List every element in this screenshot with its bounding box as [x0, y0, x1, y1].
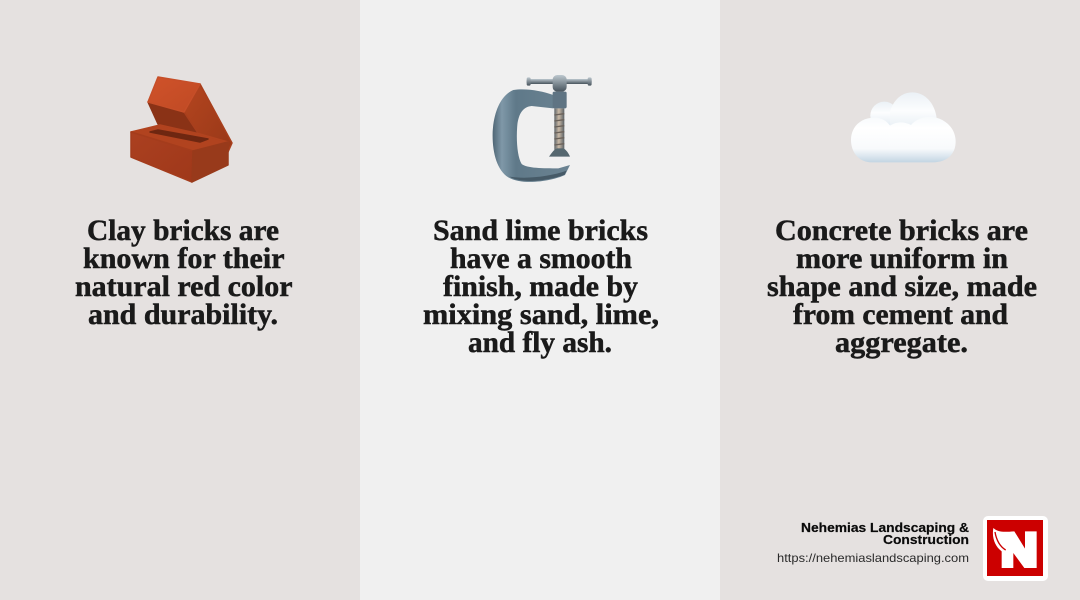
panel: concrete bricks	[720, 0, 1080, 600]
heading: concrete bricks text: aggregate.	[835, 327, 968, 359]
panel: clay bricks	[0, 0, 360, 600]
heading: clay bricks text: and durability.	[88, 299, 278, 331]
heading: sand lime bricks text: mixing sand, lime,	[423, 299, 659, 331]
heading: sand lime bricks text: have a smooth	[450, 243, 632, 275]
panel: sand lime bricks	[360, 0, 720, 600]
logo: Nehemias N badge	[983, 516, 1048, 581]
heading: sand lime bricks text: Sand lime bricks	[433, 215, 648, 247]
heading: clay bricks text: known for their	[83, 243, 284, 275]
icon: clay bricks	[131, 77, 232, 182]
footer: company name: Construction	[883, 532, 969, 547]
heading: concrete bricks text: from cement and	[793, 299, 1009, 331]
heading: concrete bricks text: shape and size, made	[767, 271, 1037, 303]
icon: clamp	[493, 75, 592, 182]
icon: cloud	[851, 92, 956, 162]
heading: concrete bricks text: more uniform in	[796, 243, 1008, 275]
footer: company name: Nehemias Landscaping &	[801, 520, 969, 535]
heading: clay bricks text: Clay bricks are	[87, 215, 279, 247]
footer: website url: https://nehemiaslandscaping.com	[777, 551, 969, 565]
heading: sand lime bricks text: finish, made by	[443, 271, 638, 303]
heading: sand lime bricks text: and fly ash.	[468, 327, 612, 359]
heading: concrete bricks text: Concrete bricks are	[775, 215, 1028, 247]
heading: clay bricks text: natural red color	[75, 271, 292, 303]
